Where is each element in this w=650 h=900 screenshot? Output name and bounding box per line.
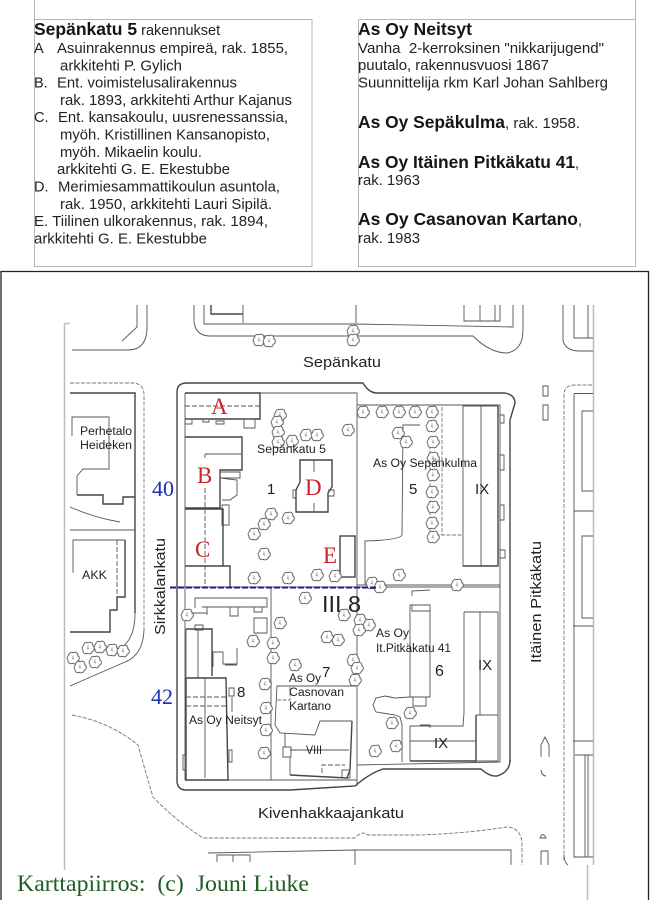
Neitsyt buildings [186,629,228,780]
Sepäkulma buildings [463,406,498,566]
building list: myöh. Mikaelin koulu. [60,145,202,161]
property labels: 5 [409,481,417,498]
building list: D. [34,180,48,196]
property labels: 6 [435,663,444,680]
As Oy Itäinen Pitkäkatu 41: As Oy Itäinen Pitkäkatu 41 [358,152,575,172]
street numbers: 40 [152,476,174,501]
As Oy Itäinen Pitkäkatu 41: , [575,156,579,172]
building list: arkkitehti G. E. Ekestubbe [57,162,230,178]
east blocks [563,305,593,351]
north blocks [72,305,147,350]
buildings [183,393,505,780]
building D [296,460,332,512]
building letters [195,394,337,568]
As Oy Sepäkulma: As Oy Sepäkulma [358,112,505,132]
building list: arkkitehti G. E. Ekestubbe [34,232,207,248]
building list: E. Tiilinen ulkorakennus, rak. 1894, [34,214,268,230]
heading: Sepänkatu 5 rakennukset: Sepänkatu 5 rakennukset [34,19,220,39]
property labels: Kartano [289,701,331,713]
As Oy Neitsyt description [358,19,608,92]
street names: Sirkkalankatu [152,538,169,635]
panel: Sepänkatu 5 buildings [34,0,636,266]
building list: myöh. Kristillinen Kansanopisto, [60,128,270,144]
building list: Ent. kansakoulu, uusrenessanssia, [58,110,288,126]
building list: Asuinrakennus empireä, rak. 1855, [57,41,288,57]
As Oy Casanovan Kartano: As Oy Casanovan Kartano [358,209,578,229]
property labels: 1 [267,481,275,498]
panel: site map frame [1,272,648,900]
property labels: III 8 [322,591,361,617]
map credit: Karttapiirros: (c) Jouni Liuke [17,871,309,897]
west blocks [70,383,144,630]
street names: Itäinen Pitkäkatu [528,541,545,663]
street names: Sepänkatu [303,354,381,371]
property labels: It.Pitkäkatu 41 [376,643,451,655]
As Oy Neitsyt description: puutalo, rakennusvuosi 1867 [358,58,549,74]
property labels: Heideken [80,440,132,452]
property labels: Sepänkatu 5 [257,444,326,456]
As Oy Casanovan Kartano: rak. 1983 [358,231,420,247]
parcel lines [177,393,500,786]
Casanova buildings [275,686,357,735]
street names [152,354,545,822]
property labels: As Oy [376,628,409,640]
building E [340,536,355,577]
As Oy Sepäkulma: , rak. 1958. [505,116,580,132]
property labels: AKK [82,570,107,582]
property labels: IX [478,657,492,674]
property labels: As Oy Sepänkulma [373,458,478,470]
As Oy Neitsyt description: As Oy Neitsyt [358,19,472,39]
building list: rak. 1950, arkkitehti Lauri Sipilä. [60,197,272,213]
street names: Kivenhakkaajankatu [258,805,404,822]
property labels: As Oy [289,673,321,685]
street plan [70,305,593,865]
As Oy Casanovan Kartano [358,209,582,247]
As Oy Casanovan Kartano: , [578,213,582,229]
As Oy Itäinen Pitkäkatu 41: rak. 1963 [358,173,420,189]
As Oy Itäinen Pitkäkatu 41 [358,152,579,189]
traffic islands [540,386,549,865]
trees [67,325,463,759]
building letters: A [211,394,228,419]
building letters: C [195,537,210,562]
property labels: 7 [322,664,330,681]
property labels: As Oy Neitsyt [189,715,263,727]
building letters: E [323,543,337,568]
property labels: Perhetalo [80,426,132,438]
property labels: VIII [306,745,322,757]
property labels: 8 [237,684,245,701]
building C [185,509,230,587]
building list: arkkitehti P. Gylich [60,58,182,74]
main block outer outline [177,383,515,762]
property labels: IX [434,735,448,752]
building A [185,393,260,419]
building list: C. [34,110,48,126]
blue dashed boundary line [170,586,377,588]
building list: Merimiesammattikoulun asuntola, [58,180,280,196]
building list [34,41,292,248]
building letters: D [305,475,322,500]
Pitkäkatu 41 buildings [410,590,430,706]
building list: Ent. voimistelusalirakennus [57,76,237,92]
property labels [80,426,492,757]
As Oy Sepäkulma [358,112,580,132]
building B [185,437,242,508]
As Oy Neitsyt description: Vanha 2-kerroksinen "nikkarijugend" [358,41,604,57]
panel: housing companies [358,19,636,266]
building list: rak. 1893, arkkitehti Arthur Kajanus [60,93,292,109]
building list: B. [34,76,48,92]
street numbers [151,476,174,709]
street numbers: 42 [151,684,173,709]
property labels: Casnovan [289,687,344,699]
property labels: IX [475,481,489,498]
south-west curve [72,715,522,865]
building list: A [34,41,44,57]
building letters: B [197,463,212,488]
As Oy Neitsyt description: Suunnittelija rkm Karl Johan Sahlberg [358,76,608,92]
